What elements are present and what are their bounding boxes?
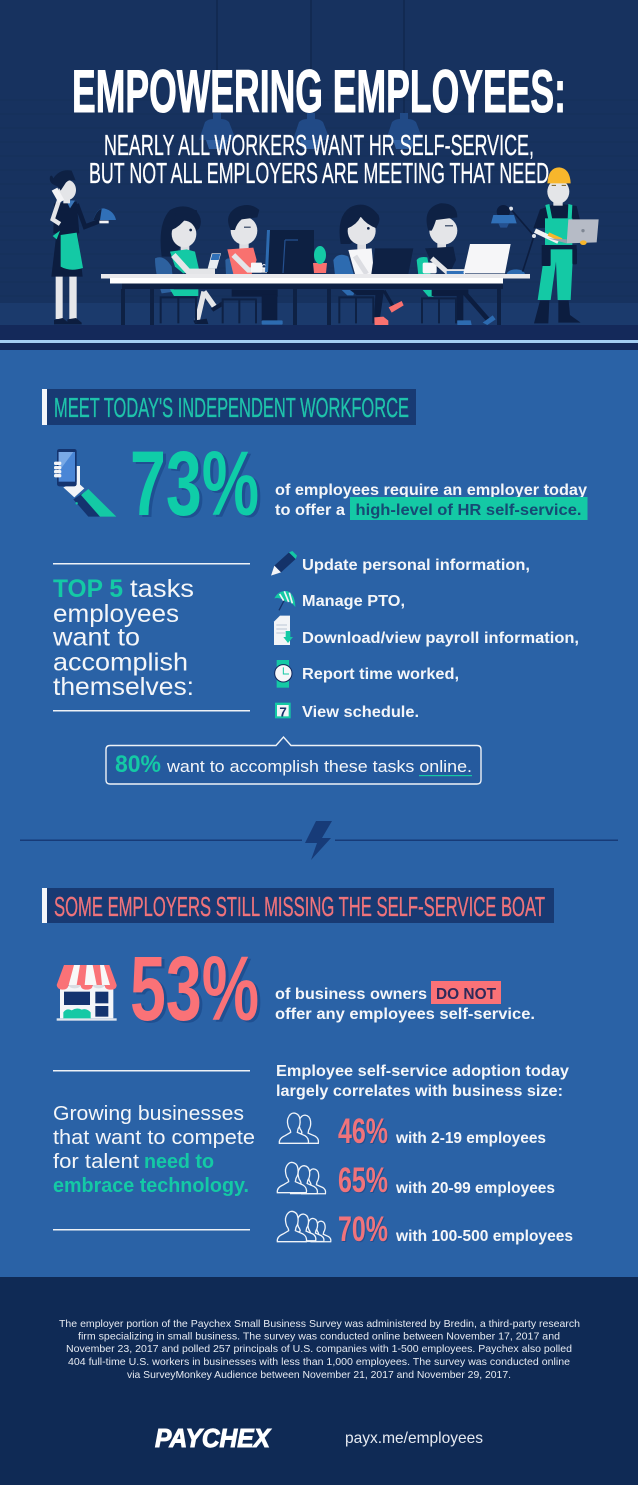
stat: 70% with 100-500 employees (338, 1210, 573, 1249)
panel: footer background (0, 1277, 638, 1485)
text block: top 5 tasks: tasks (130, 575, 194, 603)
table (101, 274, 530, 325)
text block: top 5 tasks: TOP 5 (53, 575, 123, 603)
figure: seated woman with phone (155, 206, 222, 324)
text block: top 5 tasks: themselves: (53, 673, 194, 701)
text block: growing businesses: that want to compete (53, 1127, 255, 1149)
icon: four people outline (277, 1211, 331, 1242)
icon: document download (274, 616, 293, 645)
icon: desktop monitor (265, 230, 314, 274)
panel: header background (0, 0, 638, 350)
divider with lightning bolt (20, 821, 618, 860)
text: 73% description: high-level of HR self-service. (356, 502, 582, 519)
text block: top 5 tasks: employees (53, 600, 179, 628)
text block: growing businesses: need to (144, 1151, 214, 1173)
text block: survey methodology: The employer portion of the Paychex Small Business Survey was administered by Bredin, a third-party research (59, 1318, 580, 1330)
icon: potted plant (313, 246, 327, 273)
icon: two people outline (279, 1113, 318, 1143)
stat: 65% with 20-99 employees: with 20-99 employees (395, 1180, 555, 1197)
illustration: office scene right half (333, 167, 599, 325)
stat: 53%: 53% (130, 938, 259, 1040)
text: adoption heading: Employee self-service adoption today (276, 1063, 569, 1080)
icon: desk lamp (491, 205, 536, 274)
text block: growing businesses: embrace technology. (53, 1175, 249, 1197)
text block: growing businesses (53, 1070, 255, 1230)
stat: 70% with 100-500 employees: 70% (338, 1210, 388, 1249)
icon: hanging ceiling lamps (199, 0, 423, 149)
icon: three people outline (277, 1162, 326, 1194)
text: 53% description (275, 981, 535, 1023)
text block: survey methodology: 404 full-time U.S. workers in businesses with less than 1,000 employees. The survey was conducted online (68, 1356, 570, 1368)
figure: construction worker with laptop (533, 167, 599, 323)
text block: growing businesses: Growing businesses (53, 1103, 244, 1125)
list: tasks: Report time worked, (302, 666, 459, 683)
icon: storefront (57, 965, 117, 1021)
stat: 46% with 2-19 employees: 46% (338, 1112, 388, 1151)
text: 73% description (275, 482, 588, 520)
stat: 46% with 2-19 employees (338, 1112, 546, 1151)
list: tasks (302, 557, 579, 721)
stat: 65% with 20-99 employees: 65% (338, 1161, 388, 1200)
illustration: office scene left half (50, 170, 283, 325)
text block: top 5 tasks: want to (52, 624, 140, 652)
list: tasks: Update personal information, (302, 557, 530, 574)
text block: top 5 tasks: accomplish (53, 648, 188, 676)
text block: growing businesses: for talent (53, 1151, 139, 1173)
figure: seated man with white laptop (417, 203, 511, 325)
stat: 70% with 100-500 employees: with 100-500 employees (395, 1228, 573, 1245)
logo: Paychex: PAYCHEX (155, 1423, 272, 1453)
text block: survey methodology: firm specializing in small business. The survey was conducted online between November 17, 2017 and (78, 1330, 560, 1342)
icon: pencil (271, 551, 297, 576)
list: tasks: Manage PTO, (302, 593, 405, 610)
icon: umbrella (274, 591, 295, 610)
figure: seated woman with laptop (333, 205, 413, 325)
icon: hand holding phone (54, 449, 116, 517)
list: tasks: Download/view payroll information, (302, 630, 579, 647)
figure: waitress on phone with tray (50, 170, 116, 324)
text: 53% description: of business owners (275, 986, 427, 1003)
callout: 80% online: want to accomplish these tasks online. (166, 757, 472, 776)
stat: 65% with 20-99 employees (338, 1161, 555, 1200)
stat: 73%: 73% (130, 433, 259, 535)
text block: survey methodology (59, 1318, 580, 1381)
text: 53% description: offer any employees self-service. (275, 1006, 535, 1023)
callout: 80% online (106, 737, 481, 784)
icon: calendar: 7 (279, 705, 287, 720)
stat: 46% with 2-19 employees: with 2-19 employees (395, 1130, 546, 1147)
icon: calendar (275, 703, 291, 720)
subtitle (89, 130, 549, 190)
text block: survey methodology: via SurveyMonkey Audience between November 21, 2017 and November 29, 2017. (127, 1369, 511, 1381)
text: 53% description: DO NOT (436, 986, 497, 1003)
list: tasks: View schedule. (302, 704, 419, 721)
panel: body background (0, 350, 638, 1277)
text: url: payx.me/employees (345, 1430, 483, 1447)
text: 73% description: of employees require an employer today (275, 482, 587, 499)
text: 73% description: to offer a (275, 502, 345, 519)
text: adoption heading (276, 1063, 569, 1100)
callout: 80% online: 80% (115, 751, 161, 778)
text block: survey methodology: November 23, 2017 and polled 257 principals of U.S. companies with 1-500 employees. Paychex also polled (66, 1343, 572, 1355)
text: adoption heading: largely correlates with business size: (276, 1083, 563, 1100)
text block: top 5 tasks (52, 563, 250, 712)
figure: seated man in coral shirt with cup (223, 205, 283, 325)
section heading: independent workforce (42, 389, 416, 425)
icon: watch (275, 660, 292, 688)
